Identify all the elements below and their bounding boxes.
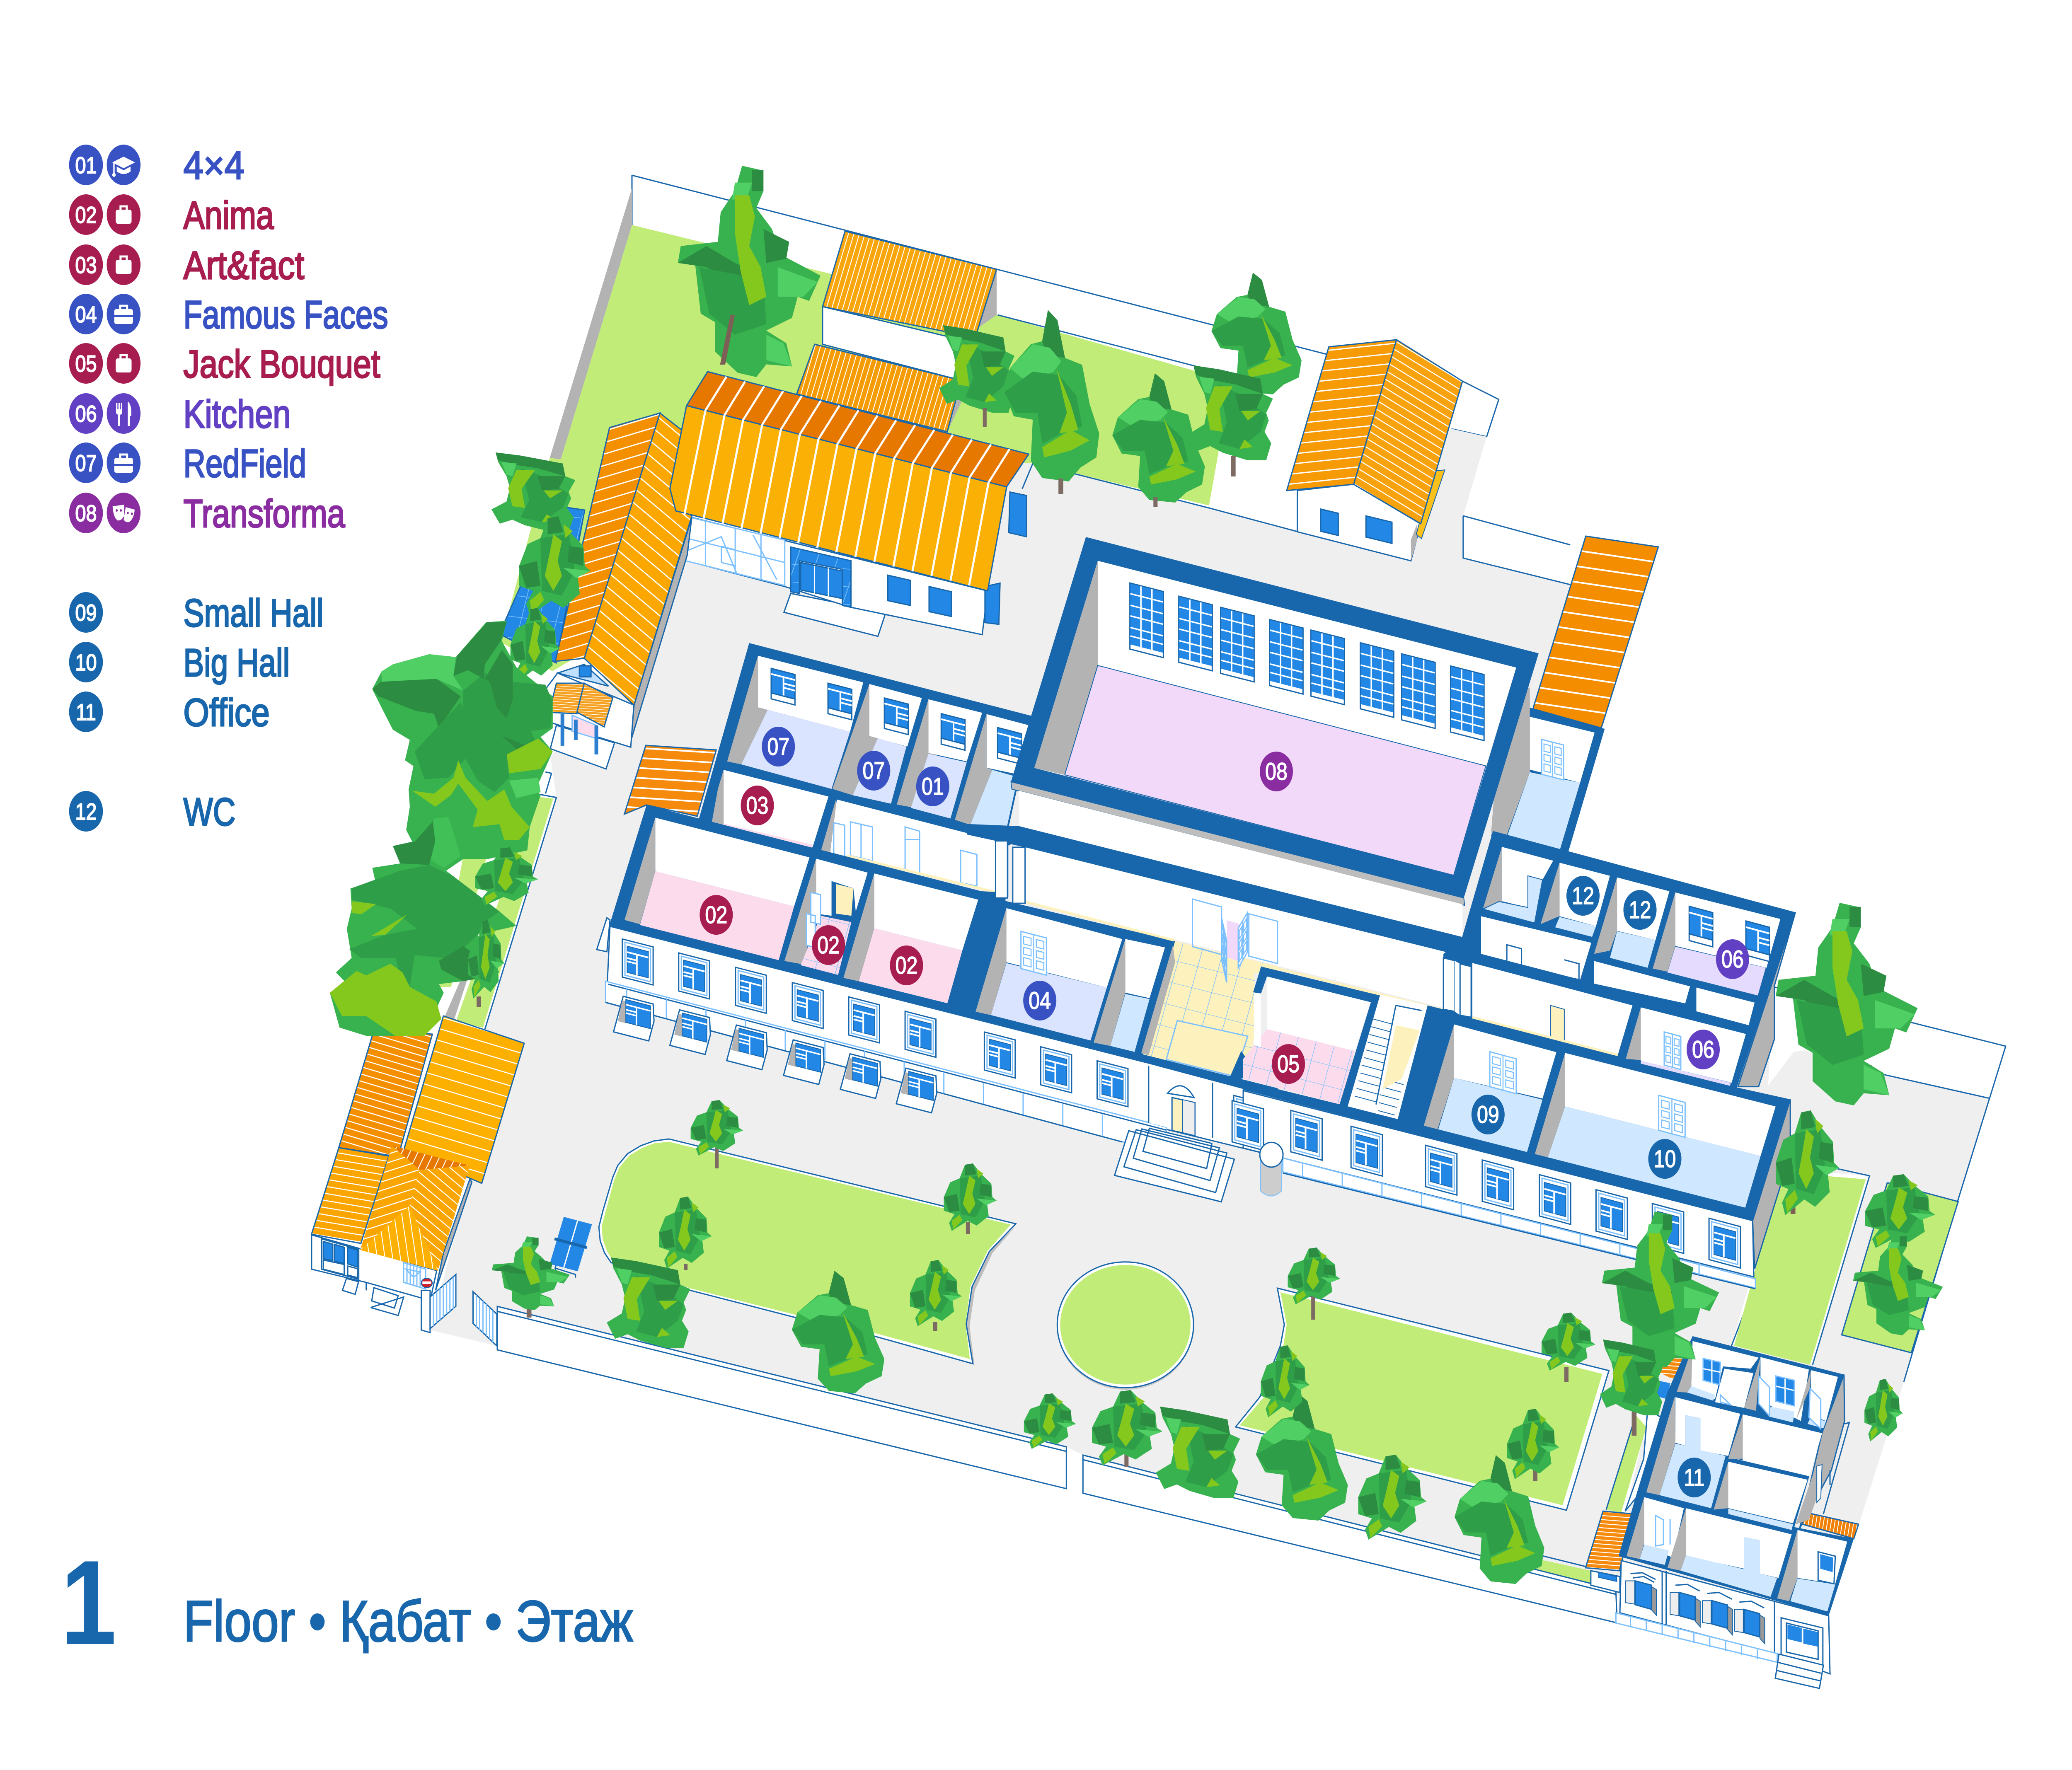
badge 03	[741, 786, 774, 825]
lower block silhouette	[609, 805, 1248, 1100]
front band east segment	[1138, 1054, 1278, 1101]
gate post	[421, 1290, 430, 1332]
badge 04: 04	[1029, 988, 1051, 1014]
badge 07	[857, 751, 890, 791]
wall	[545, 673, 634, 747]
badge 09	[1472, 1095, 1505, 1134]
legend row 05	[69, 342, 380, 386]
west wing of main building	[597, 643, 1278, 1157]
wall windows	[888, 575, 951, 617]
upper wall under hall	[1019, 791, 1462, 941]
tree	[1156, 1407, 1240, 1498]
grey side wall	[436, 1179, 472, 1290]
tree	[1853, 1234, 1943, 1335]
shed wall	[823, 307, 961, 380]
side roof left	[1585, 1511, 1634, 1571]
door	[404, 1262, 426, 1289]
ground paving	[430, 429, 1990, 1616]
gable	[558, 664, 608, 686]
room 06 A	[1653, 892, 1780, 996]
hip roof front	[360, 1206, 438, 1271]
column to room 05	[1230, 1051, 1256, 1080]
tree	[511, 608, 560, 682]
legend row 03: 03	[75, 252, 97, 278]
silhouette	[1243, 831, 1796, 1221]
porch roof left	[549, 683, 584, 714]
lawn: front right	[1236, 1288, 1609, 1510]
legend row 07: RedField	[184, 441, 306, 486]
side platform	[1823, 1422, 1849, 1514]
tree	[1092, 1390, 1162, 1467]
tree	[1261, 1345, 1310, 1417]
steps	[1115, 1128, 1234, 1202]
badge 04	[1023, 981, 1056, 1020]
tree	[1865, 1174, 1935, 1248]
room 06 B	[1626, 1007, 1746, 1086]
roof: main long roof	[555, 372, 1029, 742]
legend row 08: Transforma	[184, 491, 345, 536]
trunk	[720, 315, 735, 365]
badge 02	[812, 925, 845, 965]
step lines	[1777, 1662, 1821, 1681]
outer grey lower	[1752, 1099, 1790, 1269]
steps	[342, 1279, 404, 1315]
office steps	[1775, 1654, 1823, 1688]
room east storage	[955, 714, 1030, 833]
back wall outline	[632, 175, 1499, 437]
badge 07	[762, 727, 795, 767]
outer grey upper	[1738, 912, 1796, 1087]
room 07 B	[833, 684, 922, 804]
floor number: 1	[61, 1535, 116, 1670]
tree	[1864, 1379, 1903, 1441]
legend row 10: 10	[75, 649, 97, 675]
bright mid	[429, 817, 461, 868]
east side slim room	[1796, 1437, 1826, 1524]
columns	[1443, 958, 1471, 1017]
legend row 04	[69, 293, 388, 337]
tree	[475, 847, 538, 906]
tree	[468, 920, 504, 999]
legend row 04: 04	[75, 301, 97, 327]
trunk	[477, 996, 481, 1007]
east corridor rooms	[1481, 916, 1755, 1025]
facade	[1620, 1560, 1830, 1674]
columns	[562, 714, 596, 754]
badge 03: 03	[746, 793, 768, 819]
hip roof right	[409, 1165, 470, 1271]
roof dark	[339, 1030, 432, 1156]
basement windows	[613, 994, 937, 1114]
tree: front left	[492, 1236, 570, 1318]
room 12 B	[1594, 878, 1669, 968]
badge 09: 09	[1477, 1102, 1499, 1128]
porch door	[572, 715, 596, 738]
room 02 A	[625, 817, 809, 960]
legend row 02: 02	[75, 202, 97, 228]
shed side 2	[947, 380, 961, 432]
badge 01: 01	[922, 774, 944, 800]
tree	[1600, 1340, 1663, 1415]
badge 06	[1687, 1030, 1720, 1069]
room 05 frame	[1253, 967, 1380, 1107]
roof left	[1287, 340, 1397, 491]
badge 10	[1648, 1139, 1682, 1179]
room 07 A	[727, 656, 863, 789]
room 04 store	[1094, 939, 1165, 1052]
badge 08: 08	[1265, 759, 1288, 785]
legend row 03	[69, 243, 304, 288]
lobby floor	[1141, 941, 1278, 1076]
plinth	[1283, 1158, 1755, 1289]
badge 10: 10	[1654, 1146, 1676, 1173]
roof: back shed 2	[796, 344, 961, 432]
badge 07: 07	[862, 758, 885, 784]
tall blue shutters	[985, 492, 1026, 624]
room 04	[975, 908, 1122, 1040]
tree	[691, 1100, 743, 1168]
hall door	[1193, 899, 1278, 982]
tree	[944, 1163, 997, 1234]
middle room	[1728, 1415, 1822, 1476]
lawns: east side	[1731, 1168, 1958, 1365]
left building side	[631, 518, 692, 742]
column pair	[995, 841, 1025, 903]
shuttered windows	[1626, 1573, 1765, 1644]
badge 07: 07	[767, 734, 789, 760]
right side	[1800, 1374, 1844, 1528]
trunk	[1058, 479, 1063, 494]
tree: east big	[1776, 903, 1918, 1105]
steps	[784, 593, 886, 636]
blue tile entrance	[791, 547, 851, 607]
dark top	[453, 622, 507, 679]
room 12 A	[1541, 863, 1610, 937]
windows	[322, 1239, 359, 1279]
legend row 06: Kitchen	[184, 392, 291, 436]
stairwell	[1347, 995, 1428, 1126]
lower middle room	[1714, 1462, 1808, 1530]
badge 01	[916, 767, 949, 806]
entrance steps and cylinder	[1115, 1128, 1283, 1202]
east corridor wall	[1472, 963, 1632, 1055]
badge 02: 02	[817, 932, 840, 959]
corridor blue wall	[967, 824, 1469, 960]
badge 12	[1624, 890, 1657, 930]
tree: back garden large	[678, 166, 821, 377]
dark left	[372, 679, 461, 728]
tree	[1542, 1313, 1595, 1382]
tree	[1256, 1393, 1348, 1521]
long building below main roof	[686, 492, 1026, 636]
badge 08	[1260, 752, 1293, 791]
front band	[1243, 1081, 1752, 1221]
legend row 10: Big Hall	[184, 641, 290, 685]
badge 12: 12	[1629, 897, 1651, 924]
room badges	[700, 727, 1749, 1497]
lawn: front left	[599, 1139, 1016, 1366]
tree: over office	[1602, 1211, 1719, 1436]
front wall	[312, 1235, 437, 1301]
main entrance	[1149, 1066, 1213, 1138]
left house with porch	[545, 664, 634, 769]
legend row 12	[69, 790, 235, 834]
tree	[1112, 373, 1205, 503]
legend row 09	[69, 591, 324, 635]
bottom right room	[1777, 1530, 1847, 1611]
legend row 06: 06	[75, 401, 97, 427]
small orange roof	[625, 745, 716, 816]
tree	[792, 1271, 884, 1393]
tree	[910, 1260, 962, 1331]
legend row 11: Office	[184, 690, 270, 735]
shadow under ring	[1011, 782, 1464, 905]
hall ring	[1011, 537, 1539, 898]
facade windows	[1232, 1100, 1740, 1268]
tree	[519, 516, 591, 616]
tree	[1358, 1455, 1426, 1540]
facade windows	[622, 939, 1264, 1141]
lawn: left strip	[439, 772, 557, 1029]
room 02 B	[784, 858, 868, 975]
tree	[1189, 365, 1273, 460]
roof: back shed 1	[823, 231, 997, 338]
base platform	[550, 725, 615, 769]
badge 05: 05	[1277, 1051, 1300, 1078]
badge 12: 12	[1572, 883, 1594, 909]
side annex left	[1625, 1410, 1668, 1511]
porch roof right	[577, 683, 613, 727]
tree	[939, 325, 1014, 413]
east annex frame	[1491, 708, 1605, 857]
central hall 08 block	[967, 537, 1605, 1013]
east annex room	[1508, 717, 1595, 851]
hall floor	[1065, 665, 1486, 875]
columns	[996, 842, 1024, 903]
mid foliage upper	[463, 673, 553, 792]
facade wall	[607, 926, 1278, 1157]
badge 05	[1272, 1044, 1305, 1084]
badge 02	[700, 895, 733, 935]
bottom left room	[1627, 1497, 1684, 1565]
badge 06: 06	[1721, 946, 1744, 973]
room 01	[897, 699, 982, 819]
room 05	[1243, 977, 1371, 1105]
legend row 07	[69, 441, 306, 486]
bottom mid room	[1668, 1508, 1792, 1597]
lawn: back garden	[501, 225, 1231, 671]
room north B	[1744, 1357, 1809, 1422]
site ground	[430, 175, 2006, 1616]
lime side	[352, 901, 376, 914]
facade wall	[1243, 1091, 1754, 1277]
room 03	[712, 770, 828, 850]
back slope	[687, 372, 1029, 487]
legend row 09: 09	[75, 600, 97, 626]
lime mid	[371, 914, 407, 936]
tree: big left mass	[330, 621, 553, 1036]
boundary walls	[497, 1306, 1617, 1623]
tree	[659, 1197, 712, 1270]
office door	[1781, 1618, 1823, 1665]
legend	[69, 143, 388, 834]
silhouette	[1619, 1336, 1854, 1616]
east orange roof	[1533, 536, 1658, 728]
legend row 09: Small Hall	[184, 591, 324, 635]
legend row 08: 08	[75, 500, 97, 526]
legend row 05: 05	[75, 351, 97, 377]
lime band center	[412, 760, 530, 840]
tree	[1455, 1455, 1544, 1584]
wall east segment	[1083, 1455, 1617, 1623]
corridor wall	[1025, 847, 1462, 1013]
legend row 10	[69, 641, 290, 685]
lime lower	[330, 964, 441, 1036]
right house	[1287, 340, 1462, 561]
badge 02	[890, 945, 923, 985]
lower dark	[439, 946, 498, 981]
legend row 05: Jack Bouquet	[184, 342, 380, 386]
badge 11	[1677, 1458, 1711, 1497]
hall left wall	[1034, 561, 1098, 775]
tree: left upper	[491, 452, 575, 532]
gate right leaf	[473, 1292, 497, 1346]
tree	[1288, 1248, 1340, 1320]
room 10	[1535, 1053, 1776, 1209]
base foliage	[330, 621, 553, 1036]
lawn: office side strip	[1533, 1401, 1652, 1585]
legend row 02	[69, 193, 274, 237]
shed side	[975, 269, 997, 338]
rear orange awning	[1652, 1341, 1689, 1380]
lime band right	[507, 738, 553, 773]
legend row 07: 07	[75, 450, 97, 476]
legend row 11	[69, 690, 270, 735]
roofs: left pavilion	[312, 536, 1658, 1271]
lawn: round	[1057, 1262, 1193, 1390]
legend row 11: 11	[76, 699, 96, 725]
front slope	[670, 406, 1007, 591]
roof right	[404, 1016, 524, 1183]
legend row 12: WC	[184, 790, 235, 834]
badge 12	[1566, 876, 1600, 916]
hip roof back	[392, 1146, 470, 1170]
legend row 03: Art&fact	[184, 243, 304, 288]
badge 02: 02	[705, 902, 727, 929]
room 09	[1423, 1024, 1556, 1153]
tree	[1776, 1110, 1839, 1215]
right side back wall	[1774, 987, 2006, 1382]
room 11	[1646, 1396, 1740, 1508]
tree	[1507, 1409, 1559, 1481]
badge 02: 02	[896, 953, 917, 979]
trees	[330, 166, 1943, 1584]
small side window	[597, 918, 610, 952]
light mid	[509, 778, 541, 798]
tree	[607, 1257, 690, 1348]
light top	[381, 654, 463, 691]
legend row 02: Anima	[184, 193, 274, 237]
trunk	[1231, 456, 1236, 476]
ribs	[685, 377, 1009, 585]
east annex side	[1491, 688, 1530, 836]
room 02 C	[843, 873, 978, 1003]
big lower mid	[349, 865, 499, 1010]
room north A	[1677, 1341, 1759, 1401]
solar panel array	[499, 506, 585, 663]
tree	[1024, 1393, 1076, 1449]
legend row 01	[69, 143, 244, 188]
mid mid	[415, 702, 469, 779]
walls	[1297, 470, 1445, 561]
badge 06: 06	[1692, 1037, 1714, 1063]
legend row 04: Famous Faces	[184, 293, 388, 337]
badge 06	[1716, 939, 1749, 979]
tree	[1211, 273, 1302, 394]
back shed roofs	[796, 231, 997, 432]
cylinder post	[1260, 1142, 1283, 1196]
left roof: front half	[584, 413, 692, 705]
entrance door	[801, 563, 842, 599]
left roof: back half	[555, 413, 660, 661]
legend row 08	[69, 491, 345, 536]
plinth	[605, 981, 1166, 1142]
dark right	[485, 650, 513, 718]
roof lower left	[312, 1148, 389, 1243]
roof right	[1354, 340, 1462, 524]
dark mid left	[393, 821, 435, 865]
legend row 06	[69, 392, 291, 436]
upper block silhouette	[697, 643, 1033, 852]
corridor stub wall	[1005, 826, 1020, 846]
facade wall	[686, 516, 988, 635]
corridor north wall	[821, 800, 997, 892]
ping-pong table	[549, 1217, 592, 1278]
dark mid right	[502, 735, 542, 758]
gate left leaf	[430, 1274, 456, 1329]
trunk	[1153, 497, 1157, 507]
hip roof left	[360, 1146, 419, 1250]
left buildings group	[312, 1179, 592, 1346]
tree	[1004, 310, 1099, 481]
east yard wall lines	[1463, 516, 1570, 585]
wall west segment	[497, 1306, 1066, 1489]
legend row 01: 4×4	[184, 143, 244, 188]
hall back wall	[1098, 561, 1516, 766]
trunk	[983, 408, 987, 427]
hall windows	[1130, 583, 1484, 740]
office building	[1585, 1336, 1859, 1688]
room north C	[1796, 1370, 1838, 1429]
east wing of main building	[1232, 831, 1796, 1289]
left boundary wall shade	[550, 188, 632, 459]
back garden curb	[998, 315, 1297, 532]
room north small	[1715, 1369, 1753, 1408]
glazed lattice	[686, 517, 785, 585]
no entry sign	[421, 1278, 432, 1288]
badge 11: 11	[1684, 1465, 1704, 1491]
legend row 12: 12	[75, 798, 97, 825]
floor title: Floor • Қабат • Этаж	[184, 1589, 633, 1654]
room WC entry	[1483, 847, 1553, 923]
side roof right	[1802, 1513, 1859, 1539]
legend row 01: 01	[75, 152, 97, 178]
plinth	[1616, 1613, 1777, 1662]
small annex	[1591, 1380, 1670, 1593]
